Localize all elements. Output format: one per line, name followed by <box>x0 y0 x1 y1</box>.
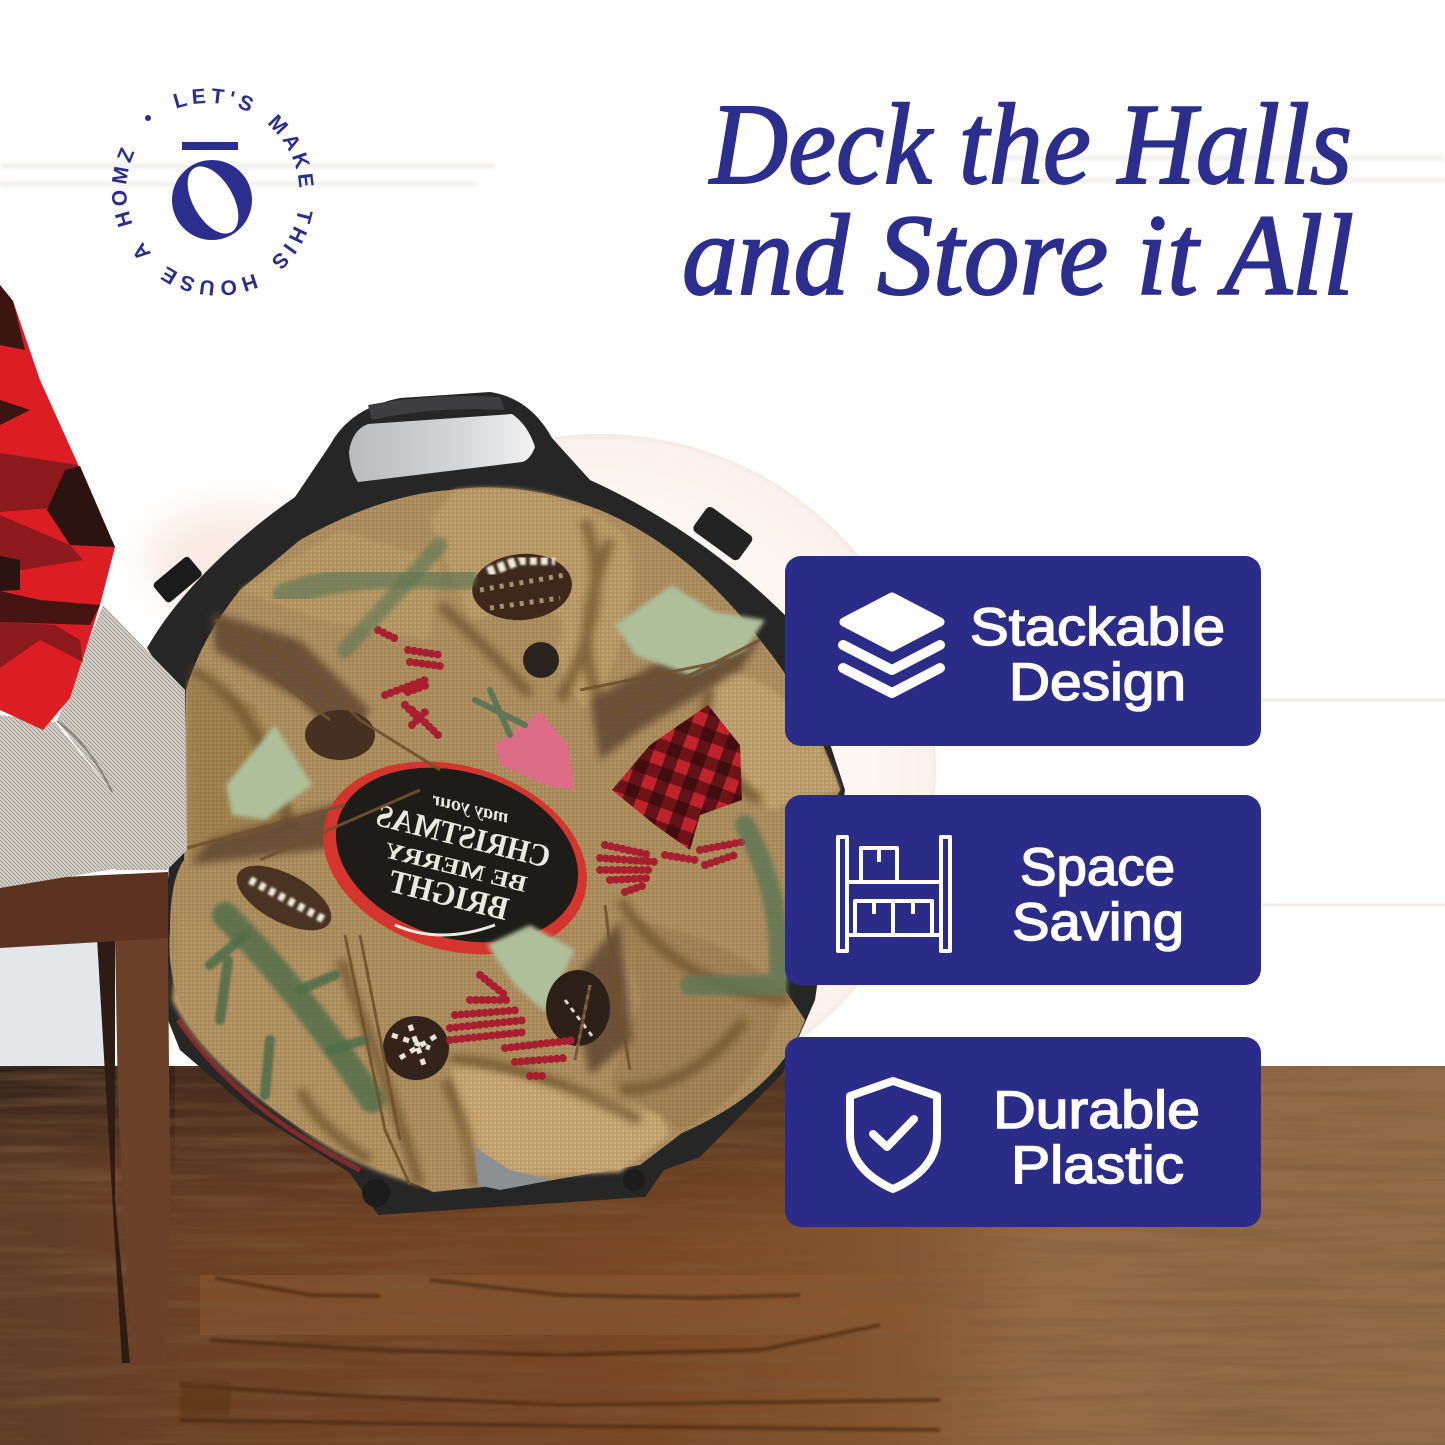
label: space saving <box>1012 838 1184 952</box>
ornament: round sign reading may your Christmas be merry bright <box>299 731 611 985</box>
ornament: round sign reading may your Christmas be merry bright: BE MERRY <box>381 837 530 897</box>
label: durable plastic <box>993 1081 1200 1195</box>
ornament: round sign reading may your Christmas be merry bright: CHRISTMAS <box>373 797 554 875</box>
photo: wreath in storage case <box>147 392 845 1215</box>
title: Deck the Halls <box>708 81 1352 209</box>
icon: storage shelf with boxes <box>838 837 950 951</box>
icon: shield with check mark <box>850 1081 937 1189</box>
title <box>682 81 1354 320</box>
ornament: pine cones <box>227 550 610 1080</box>
chair with grey upholstery and wooden leg <box>0 605 187 1363</box>
label: stackable design: Stackable <box>970 598 1225 657</box>
panel: stackable design <box>785 556 1261 746</box>
ornament: plaid bow <box>612 705 742 850</box>
label: durable plastic: Durable <box>993 1081 1200 1140</box>
title: and Store it All <box>682 192 1354 320</box>
red buffalo plaid blanket <box>0 285 115 730</box>
label: space saving: Saving <box>1012 893 1184 952</box>
wooden floor <box>0 1066 1445 1445</box>
wreath: burlap mass <box>169 488 840 1192</box>
panel: durable plastic <box>785 1037 1261 1227</box>
label: space saving: Space <box>1020 838 1175 897</box>
ornament: red berries <box>378 630 742 1076</box>
label: stackable design: Design <box>1009 653 1186 712</box>
case: black plastic frame and handle <box>147 392 845 1215</box>
ornament: round sign reading may your Christmas be merry bright: may your <box>429 788 511 828</box>
logo: circular tagline and o mark: LET'S MAKE THIS HOUSE A HOMZ <box>112 88 314 296</box>
ornament: pine sprigs <box>210 545 779 1100</box>
wreath centre: pink opening <box>495 712 575 790</box>
ornament: round sign reading may your Christmas be merry bright: BRIGHT <box>385 864 512 928</box>
ornament: frosted leaves <box>226 585 765 1012</box>
icon: stacked layers <box>843 597 940 693</box>
ornament: dark twig bundles <box>190 612 760 1075</box>
label: stackable design <box>970 598 1225 712</box>
panel: space saving <box>785 795 1261 985</box>
label: durable plastic: Plastic <box>1011 1136 1184 1195</box>
ornament: twine <box>180 620 760 1185</box>
